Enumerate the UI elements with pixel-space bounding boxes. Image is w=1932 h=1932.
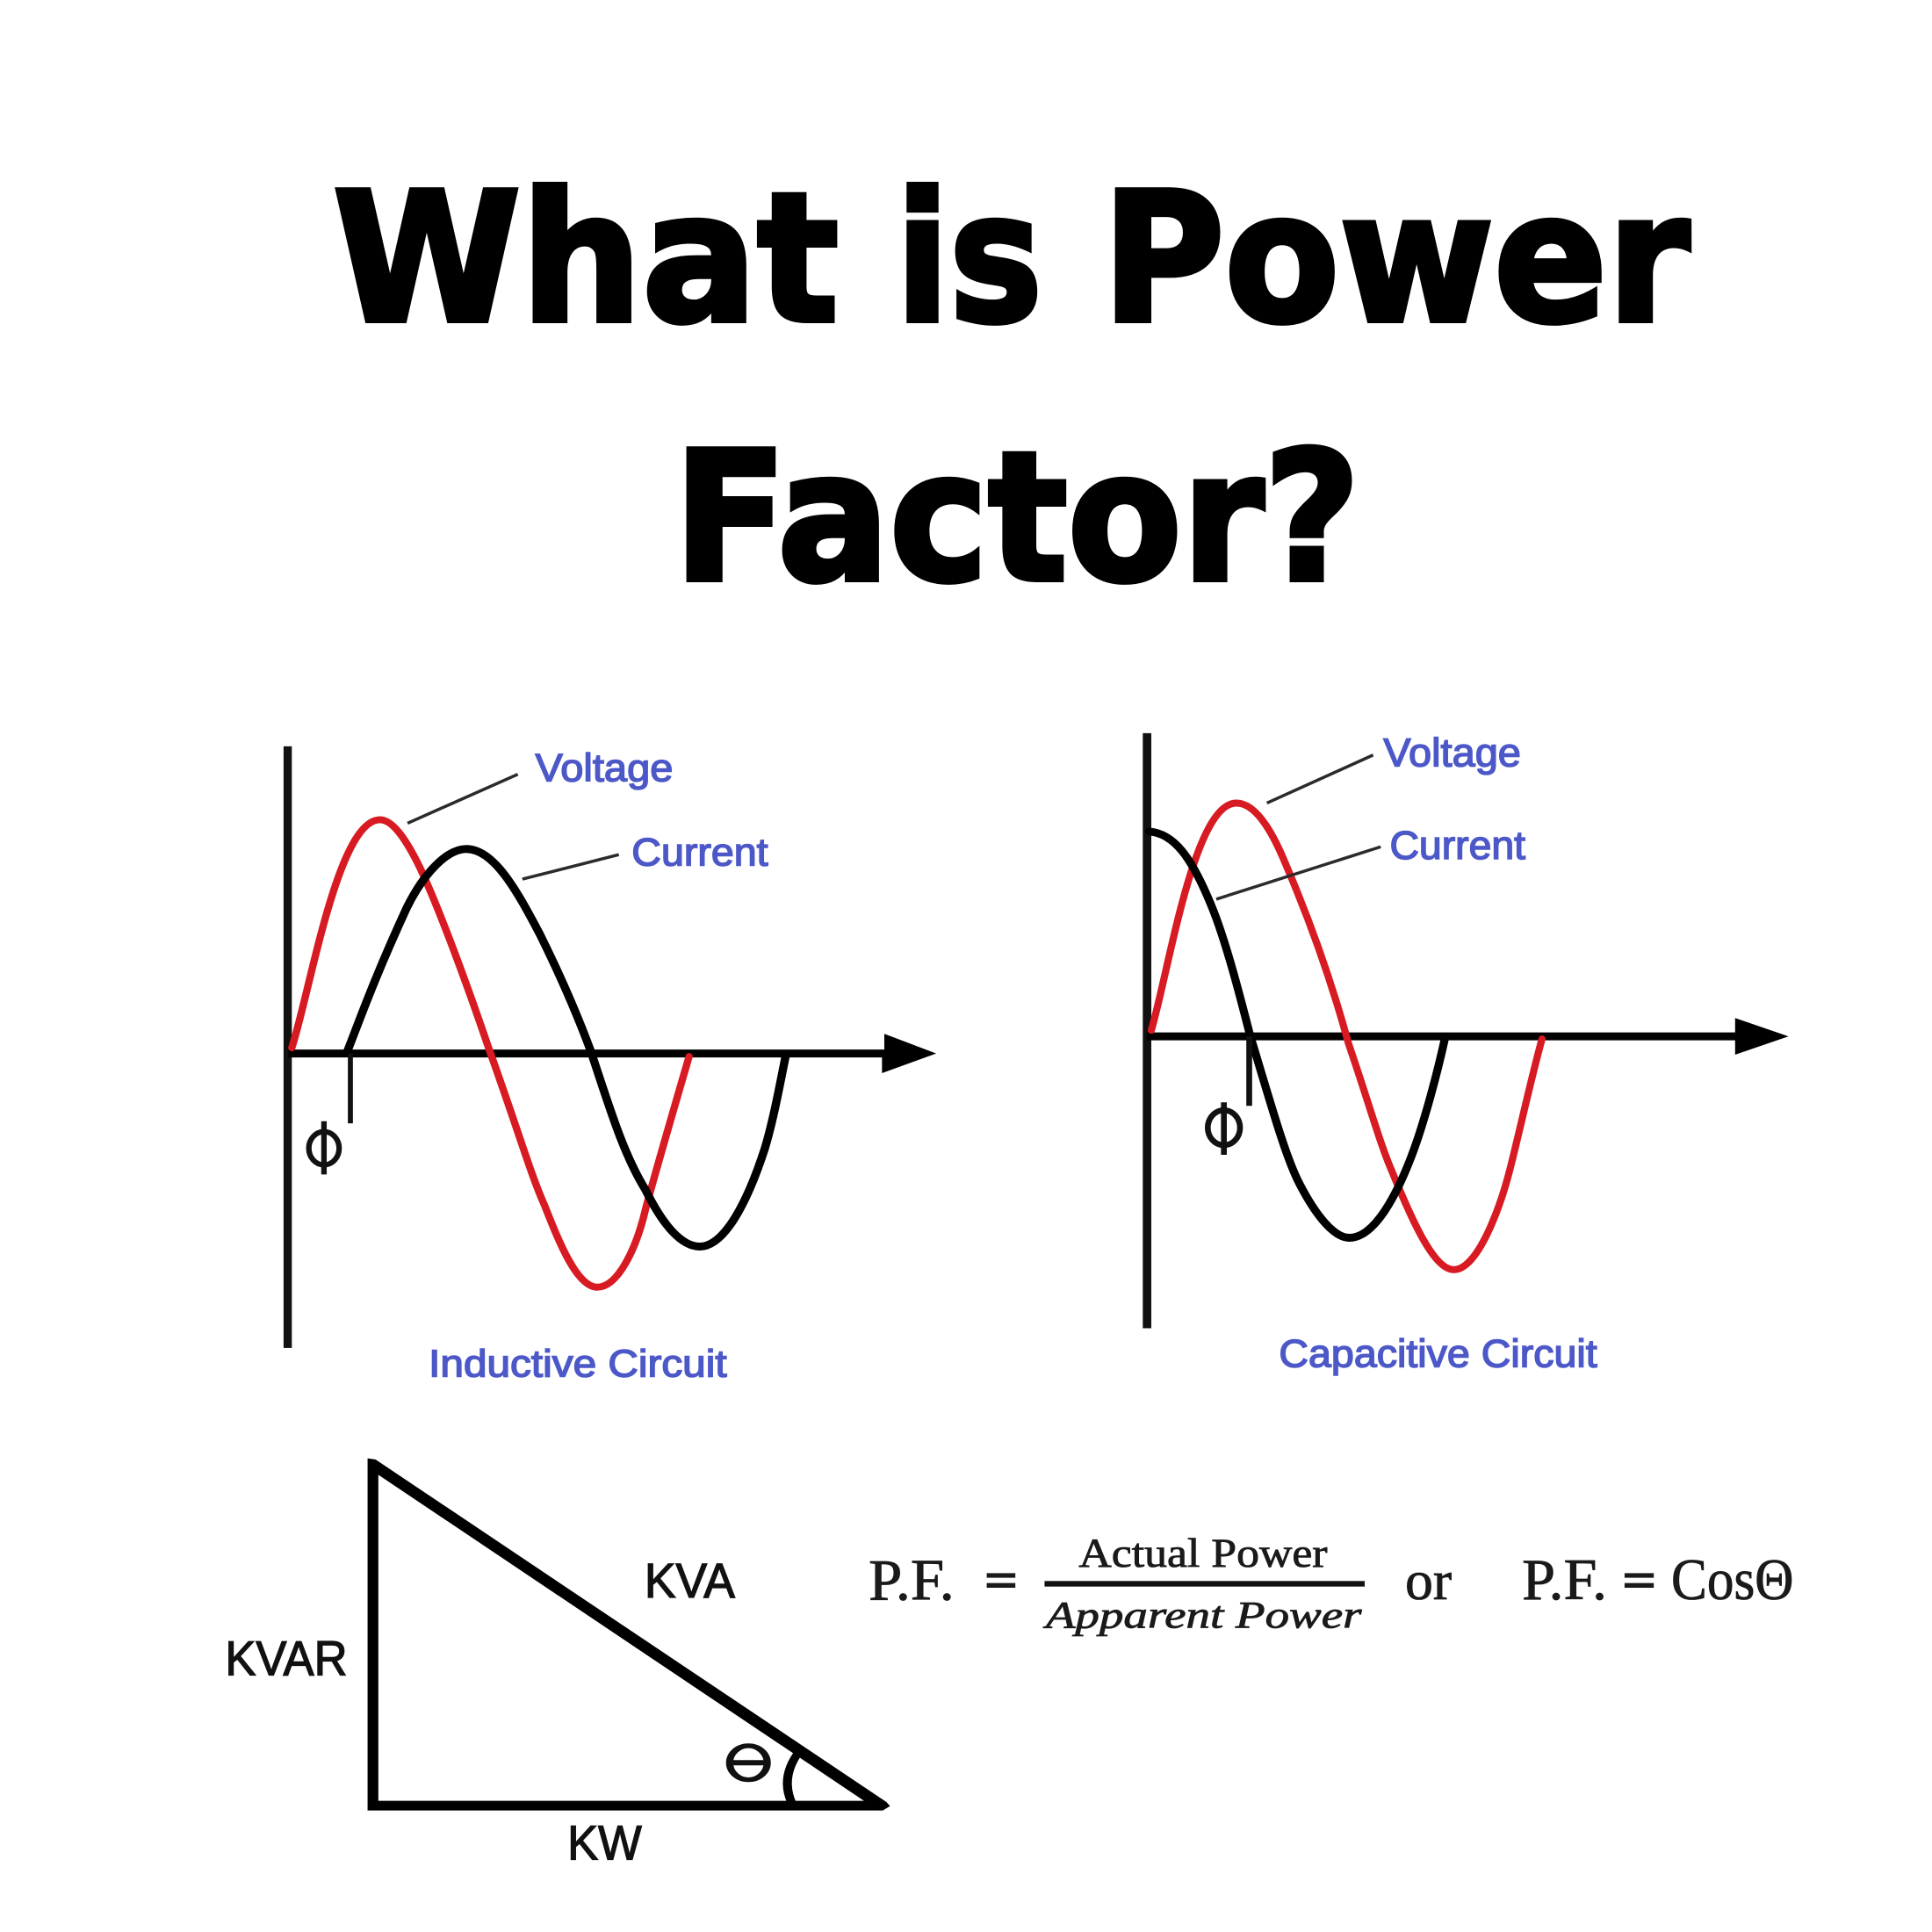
panel: power triangle	[225, 1459, 890, 1871]
second equals sign	[1625, 1573, 1654, 1588]
power factor formula: P.F.	[869, 1547, 955, 1612]
vertical axis	[1143, 733, 1151, 1328]
phase marker tick	[1246, 1036, 1252, 1106]
current leader line	[523, 854, 619, 879]
angle arc	[788, 1750, 800, 1803]
voltage leader line	[1267, 755, 1373, 803]
phi symbol	[1208, 1102, 1240, 1155]
voltage sine curve	[1151, 803, 1542, 1270]
current sine curve	[348, 849, 786, 1246]
power factor formula: P.F.	[1522, 1546, 1607, 1611]
panel: inductive circuit chart	[284, 746, 936, 1385]
voltage sine curve	[292, 819, 689, 1287]
inductive circuit caption: Inductive Circuit	[429, 1342, 727, 1385]
current label: Current	[631, 830, 768, 874]
fraction bar	[1044, 1581, 1365, 1587]
triangle outline	[368, 1459, 890, 1811]
KW label: KW	[567, 1816, 642, 1871]
power factor formula	[869, 1530, 1793, 1636]
title: Factor?	[674, 415, 1360, 623]
panel: capacitive circuit chart	[1143, 730, 1789, 1376]
current sine curve	[1149, 832, 1445, 1237]
apparent power denominator: Apparent Power	[1043, 1594, 1362, 1636]
vertical axis	[284, 746, 292, 1348]
voltage label: Voltage	[535, 746, 673, 789]
phi symbol	[309, 1121, 339, 1174]
actual power numerator: Actual Power	[1078, 1530, 1328, 1575]
horizontal axis arrow	[288, 1034, 936, 1073]
voltage leader line	[407, 775, 518, 823]
power factor formula: or	[1405, 1549, 1452, 1611]
phase marker tick	[348, 1054, 353, 1123]
equals sign	[987, 1573, 1015, 1588]
title: What	[333, 155, 839, 364]
current label: Current	[1389, 823, 1525, 868]
theta symbol	[730, 1746, 768, 1780]
KVAR label: KVAR	[225, 1632, 348, 1686]
KVA label: KVA	[645, 1554, 735, 1608]
current leader line	[1216, 847, 1381, 899]
voltage label: Voltage	[1383, 730, 1521, 775]
horizontal axis arrow	[1147, 1018, 1789, 1055]
title	[333, 155, 1690, 623]
title: Power	[1102, 155, 1690, 364]
capacitive circuit caption: Capacitive Circuit	[1279, 1331, 1597, 1376]
title: is	[896, 155, 1042, 364]
